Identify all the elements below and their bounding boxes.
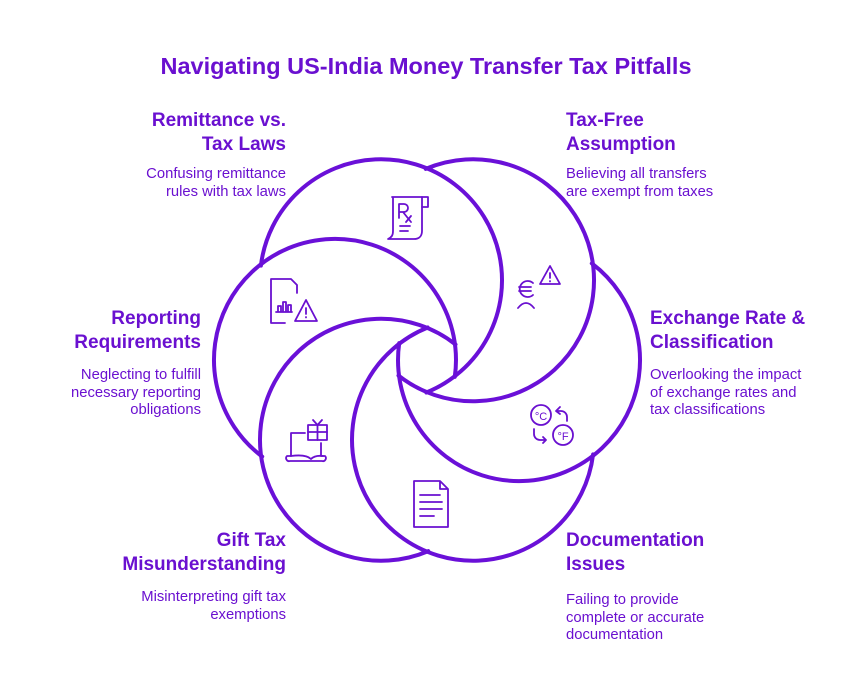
text: documentation — [566, 530, 704, 643]
text: gift tax: Misunderstanding — [122, 554, 286, 575]
text: exchange rate: Classification — [650, 332, 774, 353]
icon: euro with warning — [518, 266, 560, 308]
text: tax-free assumption: Believing all transfers — [566, 166, 707, 182]
icon: temperature conversion — [531, 405, 573, 445]
text: remittance vs tax laws: Confusing remittance — [146, 166, 286, 182]
text: exchange rate: Overlooking the impact — [650, 367, 801, 383]
text: reporting requirements: Neglecting to fulfill — [81, 367, 201, 383]
text: reporting requirements: obligations — [130, 402, 201, 418]
icon: prescription scroll — [388, 197, 428, 239]
text: exchange rate — [650, 308, 805, 418]
text: gift tax: exemptions — [210, 606, 286, 622]
icon: temperature conversion: °F — [557, 431, 569, 443]
text: tax-free assumption: Assumption — [566, 134, 676, 155]
text: reporting requirements: Requirements — [74, 332, 201, 353]
text: documentation: Issues — [566, 554, 625, 575]
text: remittance vs tax laws: Tax Laws — [202, 134, 286, 155]
text: documentation: complete or accurate — [566, 610, 704, 626]
text: remittance vs tax laws: rules with tax laws — [166, 184, 286, 200]
text: exchange rate: of exchange rates and — [650, 384, 796, 400]
text: documentation: Failing to provide — [566, 592, 679, 608]
text: tax-free assumption: are exempt from taxes — [566, 184, 713, 200]
text: documentation: Documentation — [566, 530, 704, 551]
text: reporting requirements: Reporting — [111, 308, 201, 329]
icon: temperature conversion: °C — [535, 411, 547, 423]
text: gift tax: Gift Tax — [217, 530, 286, 551]
text: exchange rate: tax classifications — [650, 402, 765, 418]
text: tax-free assumption: Tax-Free — [566, 110, 644, 131]
text: exchange rate: Exchange Rate & — [650, 308, 805, 329]
text: reporting requirements: necessary reporting — [71, 384, 201, 400]
icon: laptop gift — [286, 420, 327, 461]
text: remittance vs tax laws: Remittance vs. — [152, 110, 286, 131]
icon: document — [414, 481, 448, 527]
text: gift tax: Misinterpreting gift tax — [141, 589, 286, 605]
text: reporting requirements — [71, 308, 201, 418]
text: documentation: documentation — [566, 627, 663, 643]
text: tax-free assumption — [566, 110, 713, 200]
text: gift tax — [122, 530, 286, 622]
text: remittance vs tax laws — [146, 110, 286, 200]
icon: report with warning — [271, 279, 317, 323]
title: Navigating US-India Money Transfer Tax Pitfalls — [160, 53, 692, 79]
